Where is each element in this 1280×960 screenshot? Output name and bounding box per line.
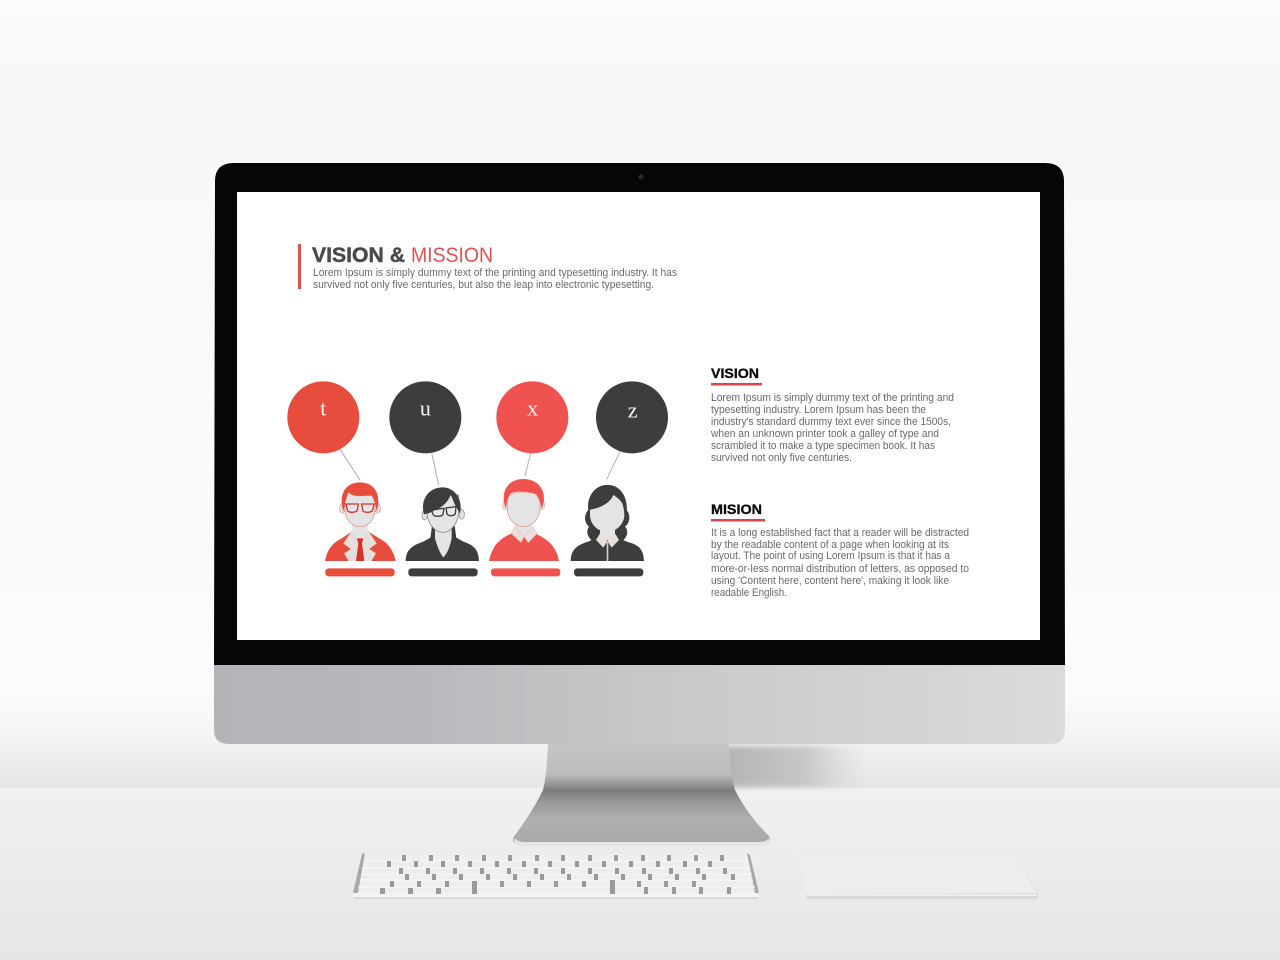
- circle z: z: [628, 398, 638, 423]
- vision underline: [711, 383, 762, 386]
- mision text: using 'Content here, content here', making it look like: [711, 575, 949, 587]
- camera: [638, 174, 644, 180]
- name bar 1: [325, 568, 395, 576]
- person 1: man with glasses and tie: [325, 482, 396, 561]
- mision text: layout. The point of using Lorem Ipsum is that it has a: [711, 550, 951, 562]
- mision heading: MISION: [711, 501, 762, 517]
- person 3: man with collar sweater: [489, 479, 559, 561]
- vision heading: VISION: [711, 365, 759, 381]
- person 2: woman with swept hair: [406, 487, 479, 561]
- circle t: t: [320, 396, 326, 421]
- monitor chin: [214, 664, 1065, 744]
- subtitle: [313, 267, 677, 291]
- person 4: woman with long curly hair: [571, 485, 644, 561]
- mision text: by the readable content of a page when looking at its: [711, 539, 949, 551]
- monitor bezel: [214, 163, 1065, 665]
- mision text: readable English.: [711, 587, 787, 599]
- keyboard: [353, 853, 759, 899]
- people chart: [287, 381, 668, 576]
- monitor: [214, 163, 1065, 744]
- stand shadow: [725, 746, 870, 787]
- circle u: [389, 381, 461, 453]
- circle x: x: [527, 396, 538, 421]
- title: VISION &: [312, 244, 405, 267]
- name bar 3: [491, 568, 560, 576]
- vision text: survived not only five centuries.: [711, 452, 852, 464]
- title accent bar: [298, 244, 301, 289]
- mision text: It is a long established fact that a reader will be distracted: [711, 527, 969, 539]
- name bar 2: [408, 568, 478, 576]
- subtitle: survived not only five centuries, but also the leap into electronic typesetting.: [313, 279, 654, 291]
- subtitle: Lorem Ipsum is simply dummy text of the printing and typesetting industry. It has: [313, 267, 677, 279]
- vision text: industry's standard dummy text ever since the 1500s,: [711, 416, 951, 428]
- trackpad: [797, 853, 1038, 899]
- monitor stand: [513, 744, 770, 846]
- mision text: more-or-less normal distribution of letters, as opposed to: [711, 563, 969, 575]
- circle z: [596, 381, 668, 453]
- connector lines: [340, 449, 620, 485]
- mision underline: [711, 519, 765, 522]
- slide screen: [237, 192, 1040, 640]
- background: desk: [0, 788, 1280, 960]
- vision text: when an unknown printer took a galley of type and: [710, 428, 939, 440]
- mision text: [711, 527, 969, 599]
- name bar 4: [574, 568, 643, 576]
- circle t: [287, 381, 359, 453]
- vision text: typesetting industry. Lorem Ipsum has been the: [711, 404, 926, 416]
- circle u: u: [420, 396, 431, 421]
- title red word: MISSION: [411, 244, 493, 267]
- vision text: Lorem Ipsum is simply dummy text of the printing and: [711, 392, 954, 404]
- vision text: [710, 392, 954, 464]
- circle x: [496, 381, 568, 453]
- vision text: scrambled it to make a type specimen book. It has: [711, 440, 935, 452]
